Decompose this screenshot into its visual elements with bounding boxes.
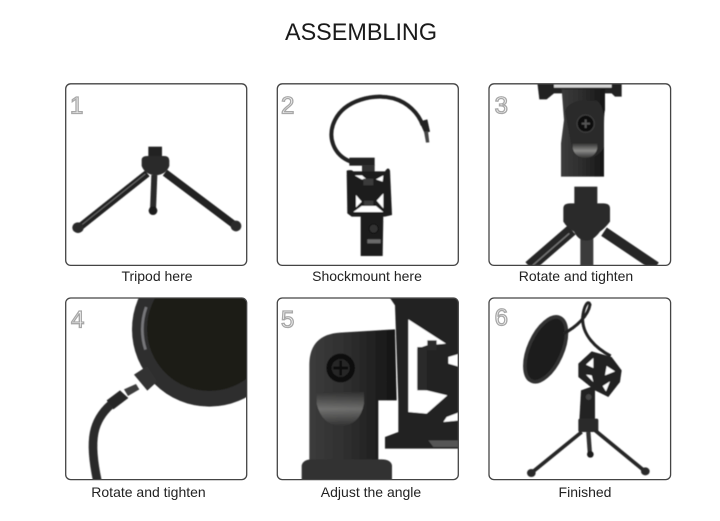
caption 2: Shockmount here [312,268,422,284]
panel: step 6 finished [495,300,650,478]
panel frame 3 [489,84,671,265]
panel frame 1 [66,84,247,265]
panel frame 6 [489,298,671,480]
panel: step 1 tripod [71,96,242,234]
icon: pop filter and gooseneck [88,298,246,479]
caption 4: Rotate and tighten [91,484,206,500]
step number 1: 1 [70,92,83,119]
panel: step 3 rotate and tighten [494,84,660,265]
title: ASSEMBLING [285,19,437,46]
icon: tripod [72,147,241,233]
panel frame 2 [277,84,458,265]
icon: assembled microphone stand [516,303,650,477]
step number 2: 2 [281,92,294,119]
icon: holder close-up [302,298,460,480]
panel: step 4 pop filter connection [70,298,246,479]
panel: step 5 adjust angle [277,298,460,480]
icon: shockmount with gooseneck [331,97,430,256]
icon: holder above tripod stud [529,83,656,267]
caption 5: Adjust the angle [321,484,421,500]
panel frame 4 [66,298,247,480]
step number 3: 3 [495,92,508,119]
step number 4: 4 [71,307,84,334]
caption 6: Finished [559,484,611,500]
step number 5: 5 [281,307,294,334]
caption 3: Rotate and tighten [519,268,633,284]
panel: step 2 shockmount [282,94,431,257]
step number 6: 6 [495,304,508,331]
caption 1: Tripod here [121,268,193,284]
panel frame 5 [277,298,458,480]
